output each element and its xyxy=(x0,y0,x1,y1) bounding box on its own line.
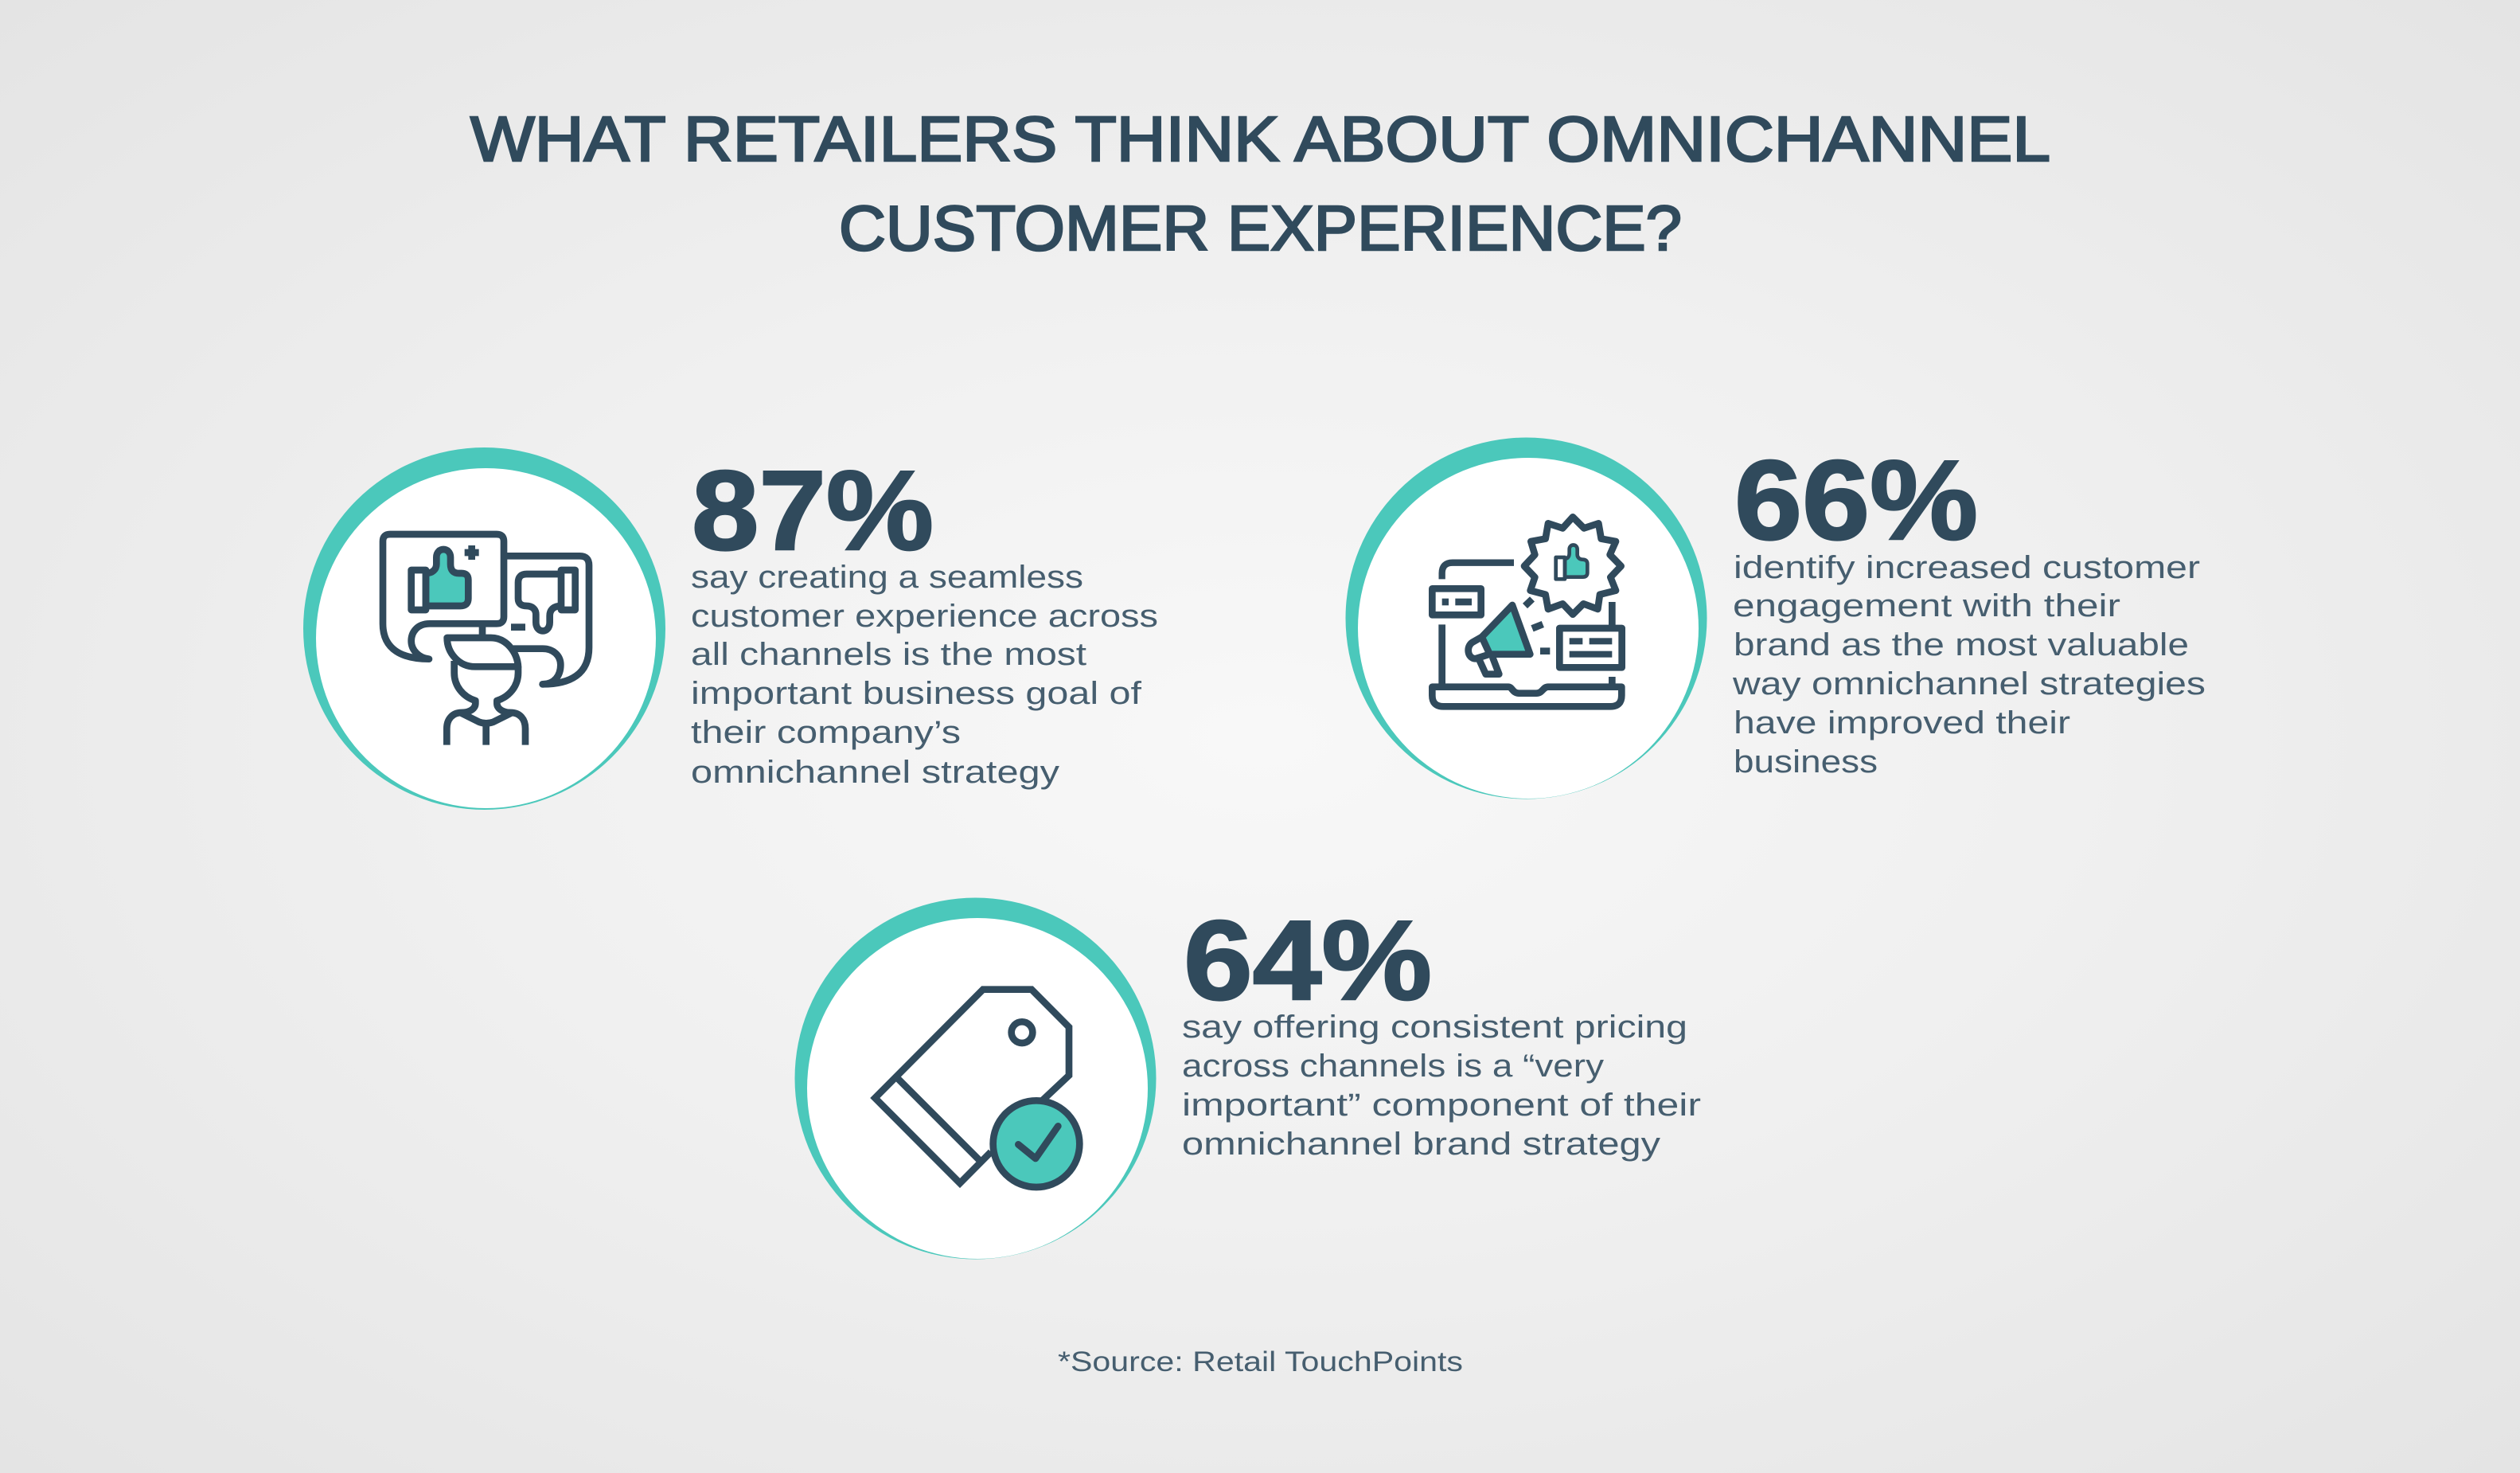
text: 66% description: engagement with their xyxy=(1733,588,2120,623)
panel: 66% customer engagement xyxy=(1345,437,2206,799)
stat: 87%: 87% xyxy=(692,447,934,574)
text: 66% description: have improved their xyxy=(1734,705,2070,740)
panel: 87% seamless customer experience xyxy=(303,447,1158,810)
title xyxy=(470,104,2050,264)
text: 87% description: customer experience across xyxy=(691,599,1158,634)
title: CUSTOMER EXPERIENCE? xyxy=(839,193,1682,264)
text: 66% description: business xyxy=(1734,744,1878,779)
text: 87% description: say creating a seamless xyxy=(691,560,1083,595)
text: 64% description: important” component of their xyxy=(1182,1088,1701,1123)
text: 66% description xyxy=(1732,550,2206,779)
title: WHAT RETAILERS THINK ABOUT OMNICHANNEL xyxy=(470,104,2050,174)
text: 66% description: identify increased customer xyxy=(1734,550,2200,585)
text: 87% description: all channels is the most xyxy=(691,637,1086,672)
text: 87% description xyxy=(691,560,1158,790)
icon: teal ring with people and speech bubbles xyxy=(303,447,665,810)
icon: teal ring with price tag and check mark xyxy=(794,898,1156,1260)
panel: 64% consistent pricing xyxy=(794,897,1701,1260)
stat: 66%: 66% xyxy=(1734,437,1978,564)
text: 66% description: brand as the most valuable xyxy=(1734,627,2189,662)
text: 87% description: omnichannel strategy xyxy=(691,755,1059,790)
text: 87% description: important business goal of xyxy=(691,676,1142,711)
text: 64% description: across channels is a “very xyxy=(1182,1049,1604,1084)
stat: 64%: 64% xyxy=(1184,897,1432,1024)
text: 87% description: their company’s xyxy=(691,715,961,750)
text: 64% description: say offering consistent pricing xyxy=(1182,1010,1687,1045)
text: 64% description: omnichannel brand strategy xyxy=(1182,1127,1660,1162)
source note: *Source: Retail TouchPoints xyxy=(1058,1346,1463,1377)
text: 64% description xyxy=(1182,1010,1701,1162)
icon: teal ring with laptop and megaphone xyxy=(1345,438,1707,799)
text: 66% description: way omnichannel strategies xyxy=(1732,666,2206,701)
